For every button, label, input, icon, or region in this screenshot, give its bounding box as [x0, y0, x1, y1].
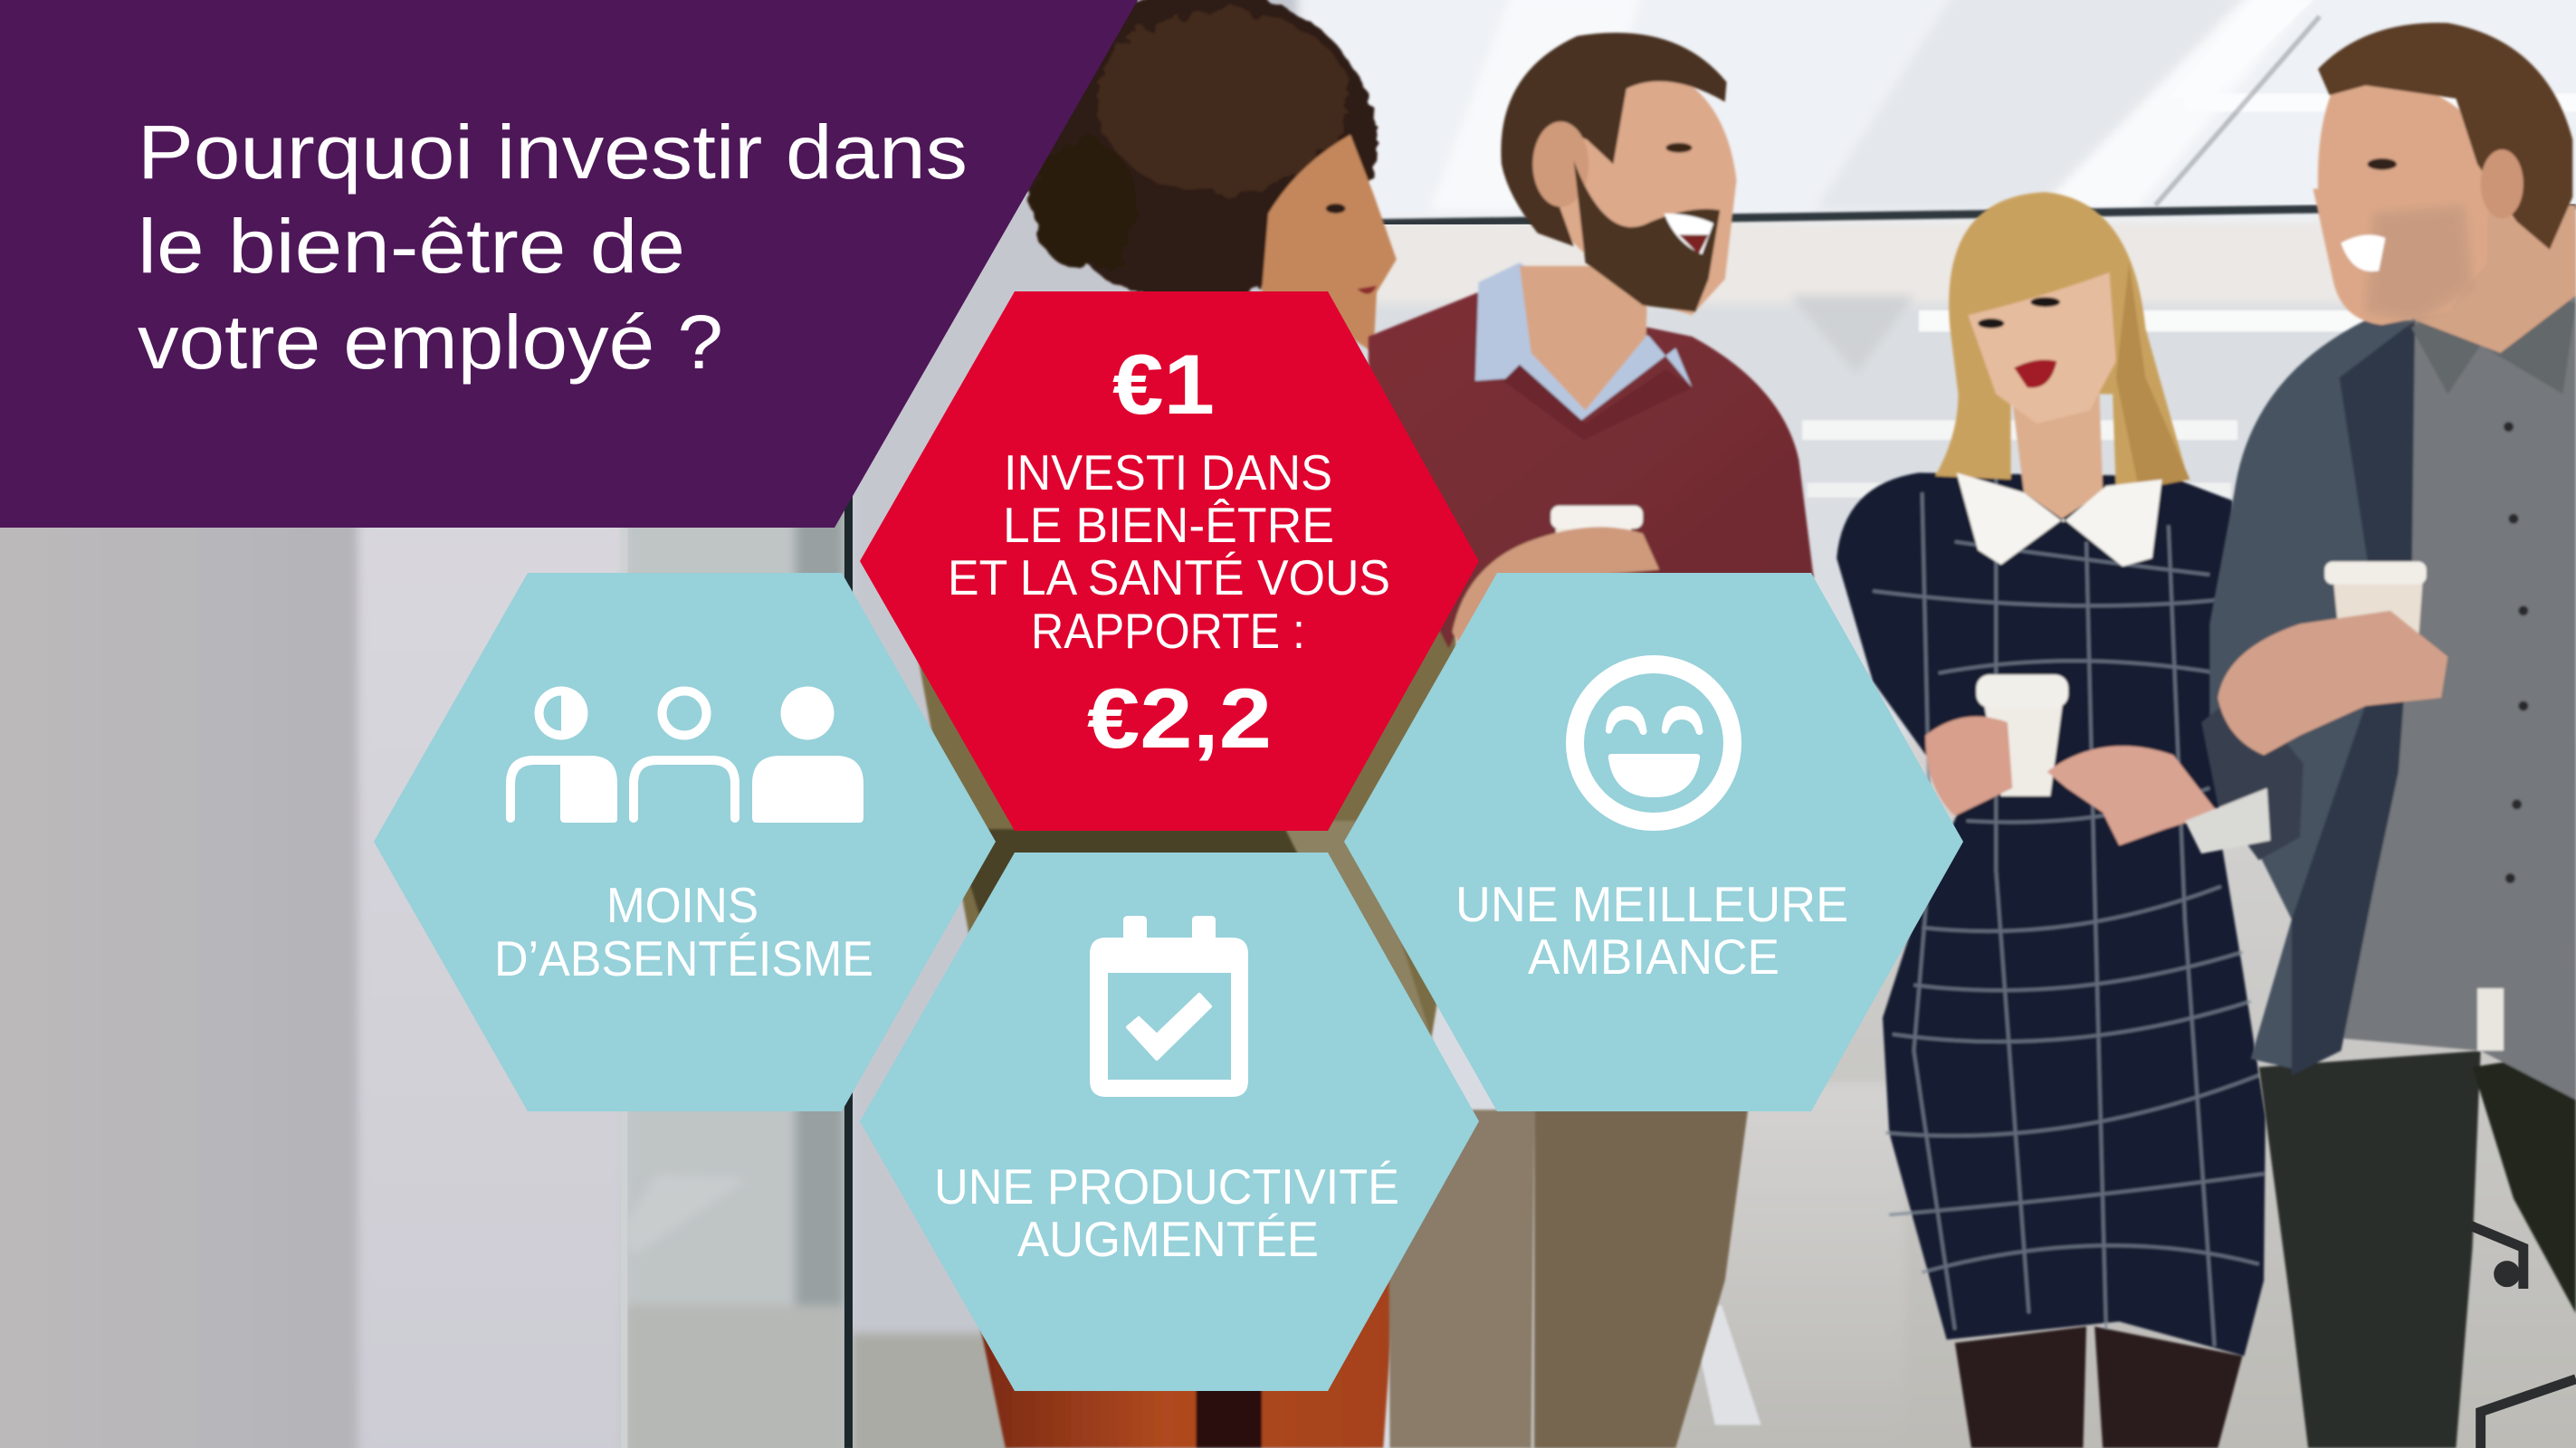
plaid lines	[1873, 476, 2264, 1346]
explanation text	[948, 444, 1390, 659]
label	[494, 877, 873, 986]
label: AMBIANCE	[1528, 929, 1779, 985]
person 1: woman with curly hair	[911, 0, 1462, 1448]
icon: calendar with check mark	[1090, 916, 1248, 1097]
hexagon: increased productivity	[860, 853, 1479, 1391]
title	[138, 110, 968, 385]
title: le bien-être de	[138, 204, 685, 289]
label: MOINS	[606, 877, 758, 933]
cup held by man	[1550, 506, 1643, 568]
title: Pourquoi investir dans	[138, 110, 968, 195]
explanation text: RAPPORTE :	[1031, 603, 1305, 659]
title panel	[0, 0, 1138, 528]
label: UNE MEILLEURE	[1455, 876, 1848, 932]
cup held by man	[2324, 561, 2427, 690]
label	[934, 1158, 1399, 1267]
hexagon: return on investment	[860, 291, 1479, 831]
label	[1455, 876, 1848, 985]
icon: laughing smiley	[1575, 664, 1732, 822]
label: D’ABSENTÉISME	[494, 930, 873, 986]
label: AUGMENTÉE	[1017, 1211, 1319, 1267]
hexagon: less absenteeism	[374, 573, 996, 1111]
person 4: man in grey blazer	[2185, 23, 2576, 1448]
explanation text: INVESTI DANS	[1004, 444, 1332, 500]
person 2: laughing man in burgundy sweater	[1369, 33, 1814, 1448]
curly hair	[1022, 0, 1377, 302]
explanation text: ET LA SANTÉ VOUS	[948, 549, 1390, 605]
explanation text: LE BIEN-ÊTRE	[1003, 497, 1334, 553]
title: votre employé ?	[138, 300, 723, 385]
label: UNE PRODUCTIVITÉ	[934, 1158, 1399, 1215]
amount returned: €2,2	[1087, 671, 1272, 766]
buttons and tag	[2504, 422, 2528, 883]
icon: three people	[506, 686, 863, 823]
amount invested: €1	[1112, 337, 1215, 432]
cup held by woman	[1976, 675, 2068, 796]
face	[1262, 135, 1397, 353]
hexagon: better atmosphere	[1344, 573, 1963, 1111]
person 3: blonde woman in plaid dress	[1837, 192, 2266, 1448]
